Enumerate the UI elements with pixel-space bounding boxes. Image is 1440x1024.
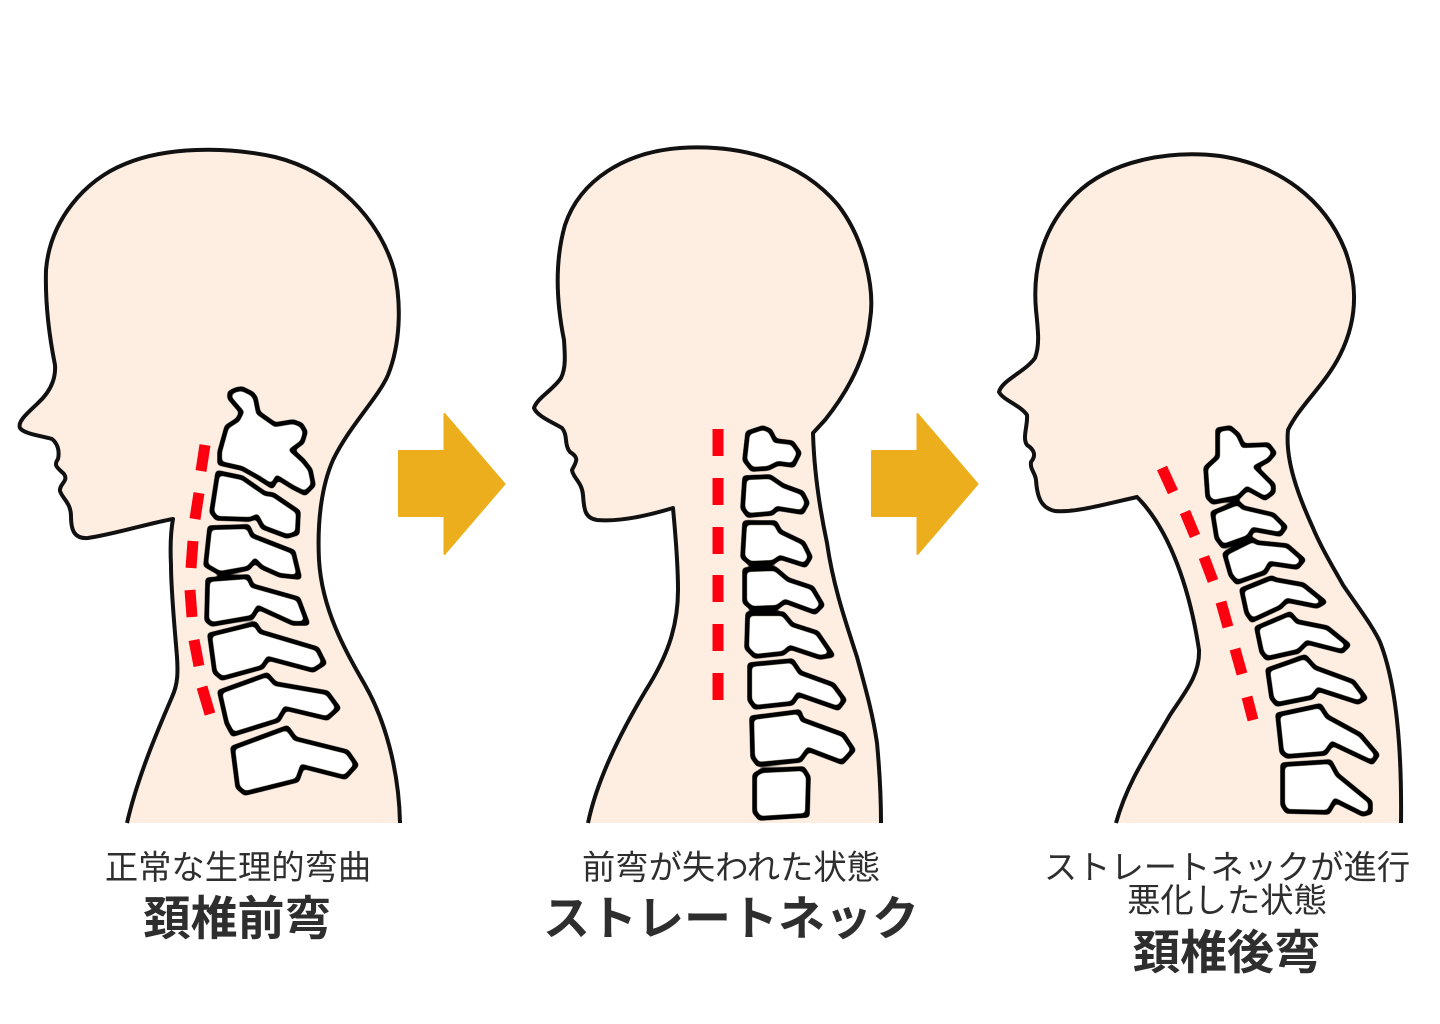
caption: progression (1044, 850, 1410, 920)
head silhouette 3 (999, 154, 1401, 823)
caption: progression: ストレートネックが進行 (1044, 850, 1410, 886)
vertebrae group 3 (1206, 428, 1377, 814)
dashed red line 2 (712, 429, 724, 700)
heading: lordosis: 頚椎前弯 (144, 892, 332, 944)
caption: normal curve: 正常な生理的弯曲 (105, 850, 371, 886)
heading: straight neck: ストレートネック (543, 892, 919, 944)
heading: kyphosis: 頚椎後弯 (1133, 926, 1321, 978)
figure: straight neck (534, 147, 881, 823)
caption: lost lordosis: 前弯が失われた状態 (582, 850, 880, 886)
figure: normal cervical lordosis (20, 150, 400, 823)
head silhouette 2 (534, 147, 881, 823)
dashed red curve 1 (190, 445, 210, 714)
arrow 2 (872, 414, 978, 554)
figure: cervical kyphosis (999, 154, 1401, 823)
dashed red line 3 (1162, 468, 1253, 720)
vertebrae group 2 (743, 428, 853, 818)
vertebrae group 1 (206, 389, 356, 793)
arrow 1 (399, 414, 504, 554)
caption: progression: 悪化した状態 (1127, 882, 1327, 920)
head silhouette 1 (20, 150, 400, 823)
